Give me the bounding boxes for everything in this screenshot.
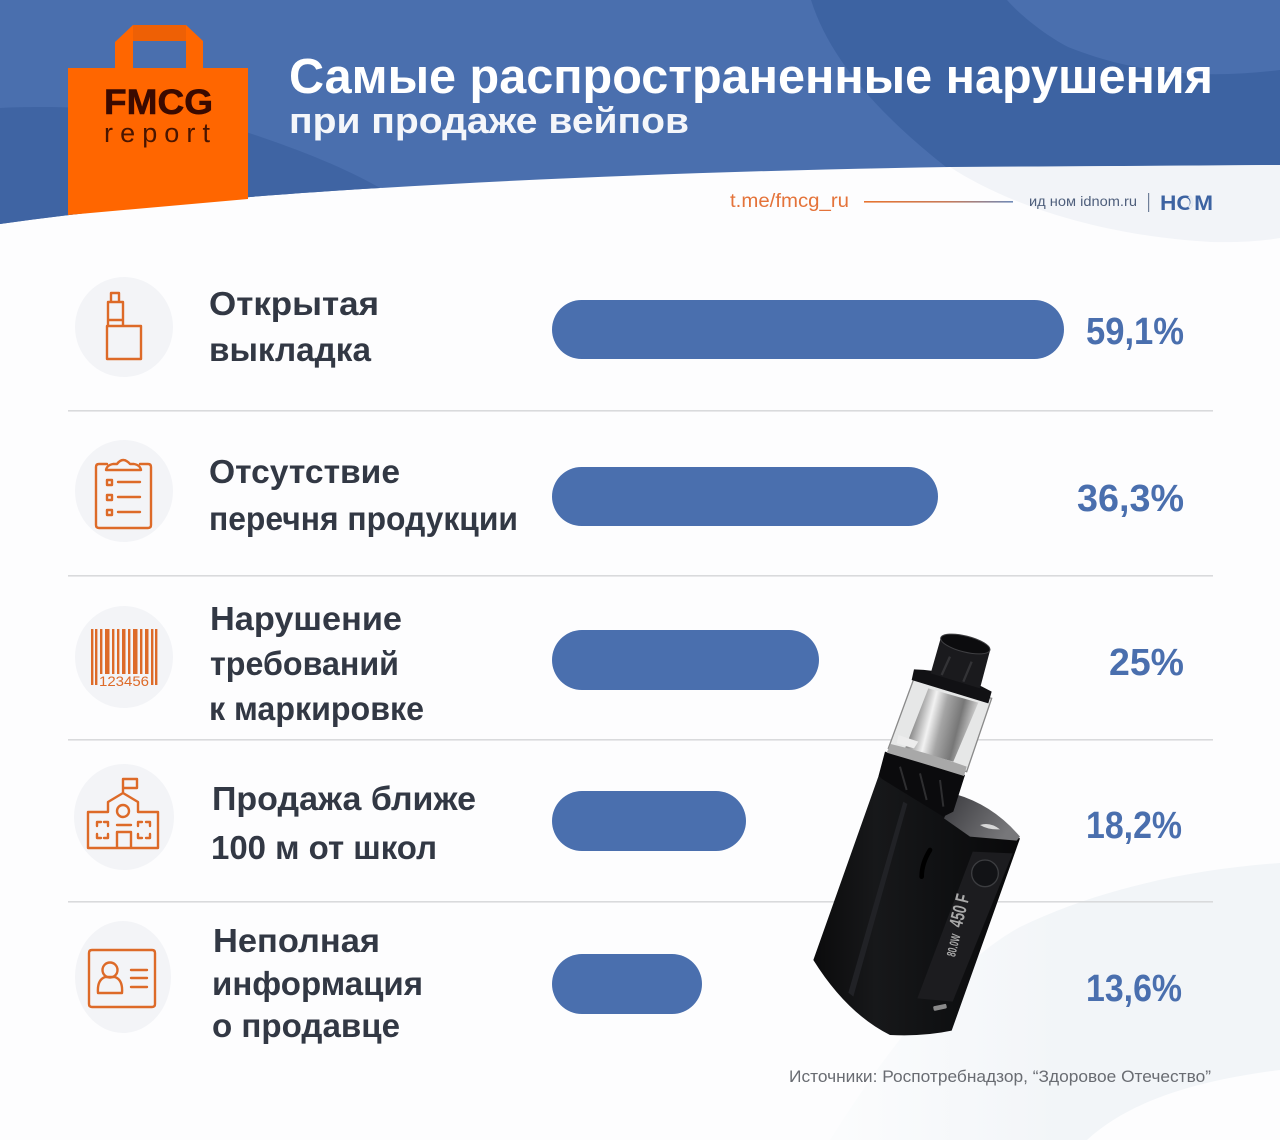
row 2: no product list bbox=[75, 440, 1184, 542]
bar bbox=[552, 954, 702, 1014]
source note: Источники: Роспотребнадзор, “Здоровое Отечество” bbox=[789, 1067, 1211, 1086]
label: Открытая bbox=[209, 285, 379, 322]
header band bbox=[0, 0, 1280, 242]
icon: school bbox=[74, 764, 174, 870]
row 5: incomplete seller information bbox=[75, 921, 1182, 1044]
vape device photo bbox=[813, 630, 1020, 1035]
icon: barcode bbox=[75, 606, 173, 708]
logo: FMCG report shopping bag: FMCG bbox=[104, 83, 213, 122]
front panel bbox=[917, 852, 1013, 1002]
label bbox=[209, 453, 518, 537]
bar bbox=[552, 467, 938, 526]
drip tip bbox=[931, 638, 990, 688]
title: Самые распространенные нарушения bbox=[289, 50, 1213, 104]
row 1: open display bbox=[75, 277, 1184, 377]
bar bbox=[552, 791, 746, 851]
label: 100 м от школ bbox=[211, 829, 437, 866]
label: Неполная bbox=[213, 922, 380, 959]
display readout: 450 F bbox=[946, 892, 975, 930]
fire button bbox=[972, 860, 998, 887]
display readout: 80.0W bbox=[944, 933, 963, 958]
value: 59,1% bbox=[1086, 311, 1184, 353]
publisher credit: НОМ bbox=[1160, 192, 1213, 215]
logo: FMCG report shopping bag bbox=[68, 25, 248, 215]
row 4: sale near schools bbox=[74, 764, 1182, 870]
icon: barcode: 123456 bbox=[99, 673, 149, 689]
telegram link: t.me/fmcg_ru bbox=[730, 191, 849, 212]
label: к маркировке bbox=[209, 690, 424, 727]
label: Отсутствие bbox=[209, 453, 400, 490]
label: выкладка bbox=[209, 331, 372, 368]
subtitle: при продаже вейпов bbox=[289, 100, 689, 141]
top plate bbox=[944, 794, 1020, 841]
label: Продажа ближе bbox=[212, 780, 476, 817]
dividers bbox=[68, 410, 1213, 903]
row 3: labelling violations bbox=[75, 600, 1184, 727]
label bbox=[209, 600, 424, 727]
glass tank bbox=[888, 678, 992, 772]
icon: vape bbox=[75, 277, 173, 377]
bottom right pale wave bbox=[830, 863, 1280, 1140]
publisher credit: ид ном idnom.ru bbox=[1029, 194, 1137, 209]
icon: clipboard bbox=[75, 440, 173, 542]
label bbox=[209, 285, 379, 368]
side slot bbox=[922, 850, 930, 877]
value: 18,2% bbox=[1086, 805, 1182, 847]
label bbox=[212, 922, 423, 1044]
label: перечня продукции bbox=[209, 500, 518, 537]
display readout bbox=[944, 892, 975, 958]
tank top cap bbox=[912, 669, 992, 703]
connector line bbox=[864, 201, 1013, 203]
icon: id card bbox=[75, 921, 171, 1033]
bar bbox=[552, 630, 819, 690]
bar bbox=[552, 300, 1064, 359]
logo: FMCG report shopping bag: report bbox=[104, 118, 210, 148]
value: 36,3% bbox=[1077, 478, 1184, 520]
label: Нарушение bbox=[210, 600, 402, 637]
threaded base bbox=[878, 752, 965, 817]
label: о продавце bbox=[212, 1007, 400, 1044]
label: информация bbox=[212, 965, 423, 1002]
device body bbox=[813, 777, 1020, 1035]
label: требований bbox=[210, 645, 399, 682]
value: 25% bbox=[1109, 642, 1184, 684]
value: 13,6% bbox=[1086, 968, 1182, 1010]
label bbox=[211, 780, 476, 866]
publisher credit bbox=[1029, 192, 1213, 215]
